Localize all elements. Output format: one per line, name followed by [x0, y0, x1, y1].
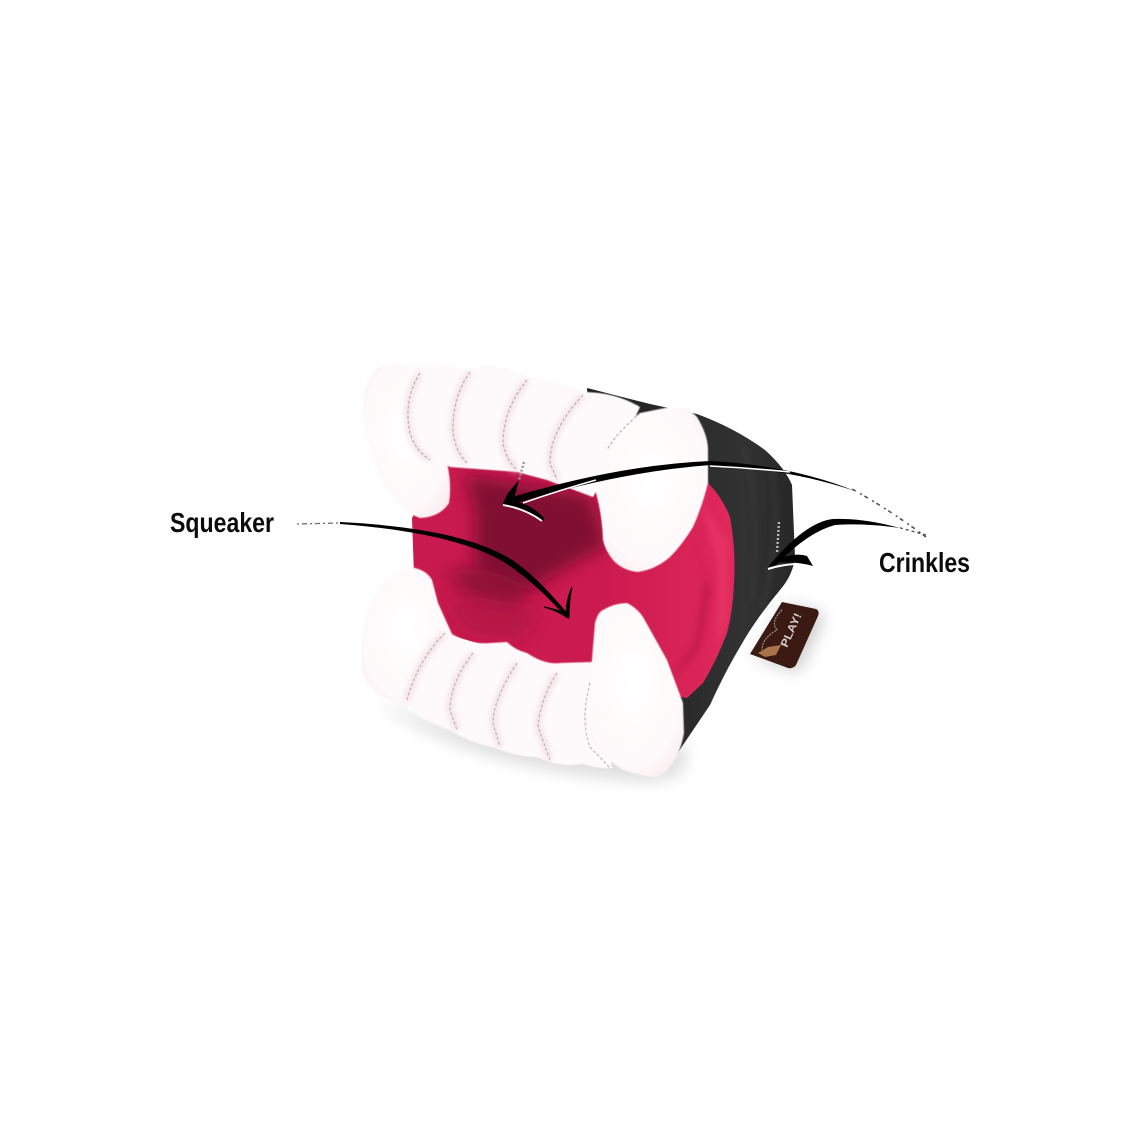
label: Crinkles: Crinkles: [879, 547, 970, 578]
arrow: Squeaker: [297, 522, 572, 618]
arrow: Crinkles upper: [503, 461, 926, 537]
fabric label tag: PLAY!: [779, 611, 804, 649]
fabric label tag: [750, 602, 824, 671]
interior shadows: [445, 475, 728, 680]
lower right fang: [583, 603, 684, 777]
lower seam shading: [407, 633, 557, 760]
upper right fang: [593, 407, 708, 572]
lower tooth seams: [407, 633, 610, 768]
upper left fang: [363, 363, 450, 518]
ground shadow: [375, 700, 690, 782]
toy: plush mouth: [361, 363, 824, 782]
dark outer body: [587, 388, 795, 765]
lower left fang: [361, 568, 452, 707]
label: Squeaker: Squeaker: [170, 507, 274, 538]
lower teeth band: [361, 568, 684, 777]
upper seam shading: [408, 372, 583, 480]
arrow: Crinkles lower: [768, 519, 926, 569]
pink mouth interior: [412, 460, 734, 698]
upper tooth seams: [408, 372, 640, 480]
upper teeth band: [363, 363, 708, 572]
